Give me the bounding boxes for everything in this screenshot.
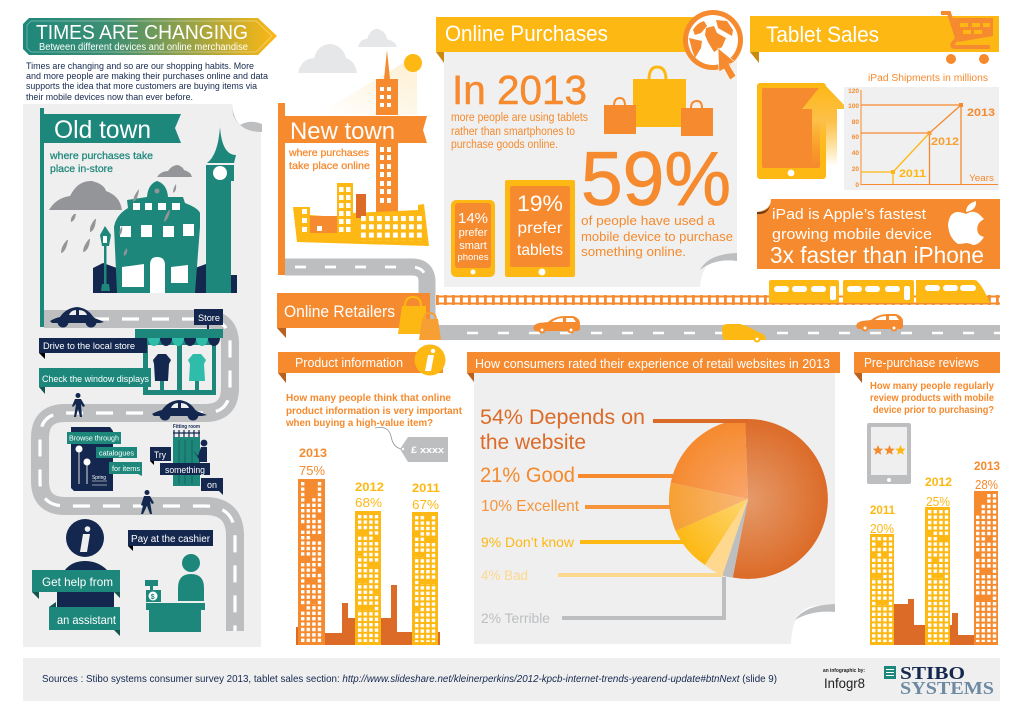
- logo: infogr8: an infographic by:: [823, 668, 865, 674]
- bar 2013: 2013: [299, 446, 327, 460]
- line chart: ipad shipments: 0: [855, 182, 859, 189]
- 59 percent stat: something online.: [581, 244, 686, 259]
- in 2013 text: purchase goods online.: [451, 139, 558, 151]
- callout: ipad fastest growing: [757, 199, 1000, 269]
- icon: walking person: [141, 490, 154, 514]
- 59 percent stat: 59%: [581, 137, 731, 222]
- bar 2011: [412, 481, 440, 645]
- chart title: iPad Shipments in millions: [868, 73, 988, 84]
- label: check the window displays: [39, 368, 151, 394]
- bar 2012: 25%: [926, 495, 950, 509]
- bar 2013: 28%: [975, 478, 998, 492]
- bar 2012: [925, 477, 952, 645]
- icon: street lamp: [100, 226, 111, 291]
- label: an assistant: an assistant: [57, 613, 117, 627]
- banner: product information: [278, 344, 446, 383]
- heading: old town: Old town: [54, 116, 151, 144]
- label: 4 percent: [481, 568, 723, 583]
- icon: navy car: [152, 400, 207, 420]
- icon: tablet 19 percent: [505, 180, 575, 277]
- label: 9 percent: [481, 535, 684, 550]
- banner: online retailers: Online Retailers: [284, 303, 395, 321]
- bar 2013: 2013: [974, 461, 1000, 473]
- new town subtitle: where purchases: [288, 147, 369, 159]
- callout: ipad fastest growing: iPad is Apple’s fastest: [772, 206, 927, 223]
- bar 2013: [298, 446, 327, 645]
- bar 2012: 2012: [355, 480, 384, 494]
- icon: tablet with stars: [867, 423, 911, 484]
- label: for items: for items: [112, 464, 140, 473]
- icon: yellow car: [722, 324, 766, 342]
- label: 2 percent: [481, 577, 726, 626]
- title banner: [23, 18, 277, 55]
- question: pre-purchase reviews: review products with mobile: [870, 392, 994, 404]
- label: on: on: [207, 480, 217, 490]
- line chart: ipad shipments: 2013: [967, 107, 995, 119]
- 59 percent stat: [581, 137, 733, 259]
- intro text: supports the idea that more customers are buying items via: [26, 81, 258, 92]
- bar 2012: 68%: [355, 495, 382, 510]
- label: store: Store: [198, 313, 220, 324]
- icon: person: [193, 440, 207, 462]
- question: product information: when buying a high-value item?: [285, 417, 433, 429]
- icon: tablet 19 percent: tablets: [517, 242, 563, 259]
- icon: info circle: [66, 519, 104, 557]
- heading: new town: [278, 103, 427, 275]
- icon: info: [414, 344, 446, 376]
- chart: pre-purchase buildings: [870, 461, 1000, 645]
- icon: tablet 19 percent: 19%: [517, 191, 563, 216]
- label: something: [160, 463, 210, 475]
- label: 2 percent: 2% Terrible: [481, 611, 550, 626]
- icon: walking person: [72, 393, 85, 417]
- callout: ipad fastest growing: growing mobile device: [772, 226, 932, 243]
- label: browse through: Browse through: [69, 434, 119, 442]
- line chart: ipad shipments: [844, 87, 999, 190]
- banner: pre-purchase reviews: [854, 352, 1000, 383]
- new town: orange tower: [376, 50, 398, 213]
- banner: pre-purchase reviews: Pre-purchase reviews: [864, 356, 979, 370]
- in 2013 text: more people are using tablets: [451, 112, 588, 124]
- label: 21 percent: 21% Good: [480, 464, 575, 487]
- icon: price tag: £ xxxx: [411, 445, 445, 456]
- bar 2012: 2012: [925, 477, 952, 489]
- label: store: [194, 309, 223, 329]
- label: 4 percent: 4% Bad: [481, 568, 528, 583]
- label: 9 percent: 9% Don’t know: [481, 535, 574, 550]
- line chart: ipad shipments: 100: [848, 103, 859, 110]
- old town subtitle: where purchases take: [49, 150, 153, 162]
- intro text: Times are changing and so are our shopping habits. More: [26, 61, 254, 72]
- sources text: Sources : Stibo systems consumer survey 2013, tablet sales section: http://www.slideshare.net/kleinerperkins/2012-kpcb-internet-trends-yearend-update#btnNext (slide 9): [42, 673, 777, 685]
- page curl: [791, 604, 835, 644]
- callout: ipad fastest growing: 3x faster than iPhone: [770, 242, 984, 268]
- line chart: ipad shipments: 80: [852, 119, 859, 126]
- icon: shopping cart: [941, 13, 993, 64]
- logo: infogr8: [823, 668, 865, 691]
- store front: [135, 329, 223, 395]
- heading: old town: [44, 114, 181, 144]
- label: try: [150, 447, 171, 465]
- new town subtitle: take place online: [289, 160, 370, 172]
- panel: old town: [23, 104, 262, 647]
- bar 2011: 2011: [412, 481, 440, 495]
- icon: till: $: [151, 594, 155, 601]
- new town: clouds and sun: [298, 29, 422, 115]
- old town skyline: [93, 127, 237, 293]
- icon: smartphone 14 percent: 14%: [458, 210, 488, 227]
- icon: tablet 19 percent: prefer: [518, 220, 563, 237]
- page curl: [232, 104, 262, 132]
- line chart: ipad shipments: 120: [848, 88, 859, 95]
- line chart: ipad shipments: 2012: [931, 136, 959, 148]
- bar 2013: [974, 461, 1000, 645]
- bar 2011: 67%: [412, 497, 439, 512]
- intro text: their mobile devices now than ever before.: [26, 92, 193, 103]
- icon: ipad with growth arrow: [757, 83, 848, 179]
- icon: shopping bags: [604, 67, 713, 136]
- old town subtitle: [49, 150, 153, 175]
- line chart: ipad shipments: 20: [852, 166, 859, 173]
- question: pre-purchase reviews: device prior to purchasing?: [873, 404, 994, 416]
- flag pole: [40, 108, 44, 327]
- title banner: TIMES ARE CHANGING: [36, 22, 248, 44]
- question: product information: How many people think that online: [286, 392, 451, 404]
- logo: stibo systems: [884, 663, 994, 698]
- icon: navy car: [50, 307, 104, 328]
- road: [40, 319, 235, 631]
- label: try: Try: [154, 450, 166, 460]
- icon: train: [769, 280, 990, 303]
- banner: ratings: [467, 352, 840, 382]
- label: get help from: Get help from: [42, 575, 113, 589]
- pie chart: [669, 419, 828, 579]
- icon: orange car: [533, 316, 580, 334]
- label: 10 percent: 10% Excellent: [481, 498, 580, 515]
- panel: retail website ratings: [467, 352, 840, 644]
- icon: smartphone 14 percent: prefer: [459, 227, 488, 239]
- question: product information: [285, 392, 462, 429]
- logo: stibo systems: SYSTEMS: [900, 678, 994, 698]
- in 2013 text: In 2013: [452, 67, 587, 113]
- label: something: something: [165, 465, 205, 475]
- banner: product information: Product information: [295, 356, 403, 370]
- 59 percent stat: of people have used a: [581, 213, 716, 228]
- logo: infogr8: Infogr8: [824, 675, 865, 691]
- label: pay at the cashier: Pay at the cashier: [131, 534, 211, 545]
- icon: retail bags: [398, 297, 441, 340]
- icon: smartphone 14 percent: phones: [457, 252, 489, 263]
- bar 2011: 2011: [870, 505, 896, 517]
- icon: apple: [948, 201, 984, 245]
- fitting room: [173, 424, 207, 486]
- intro text: and more people are making their purchases online and data: [26, 71, 269, 82]
- intro text: [26, 61, 269, 103]
- icon: smartphone 14 percent: smart: [459, 240, 487, 252]
- banner: online retailers: [277, 293, 441, 340]
- in 2013 text: [451, 67, 588, 151]
- panel: online purchases: [436, 10, 743, 287]
- catalogue: Spring: [92, 475, 106, 481]
- label: on: [201, 478, 223, 495]
- label: 21 percent: [480, 464, 673, 487]
- heading: new town: New town: [290, 118, 395, 145]
- question: product information: product information is very important: [286, 405, 462, 417]
- banner: tablet sales: Tablet Sales: [766, 22, 879, 47]
- bar 2011: 20%: [870, 522, 894, 536]
- label: 54 percent: the website: [480, 430, 586, 454]
- banner: tablet sales: [750, 13, 999, 64]
- icon: clouds and rain: [49, 165, 192, 253]
- 59 percent stat: mobile device to purchase: [581, 229, 733, 244]
- label: pay at the cashier: [128, 530, 213, 551]
- footer: [23, 658, 1000, 701]
- logo: stibo systems: STIBO: [900, 663, 965, 683]
- bar 2011: [870, 505, 896, 645]
- line chart: ipad shipments: 40: [852, 150, 859, 157]
- in 2013 text: rather than smartphones to: [451, 126, 575, 138]
- label: drive to the local store: Drive to the local store: [43, 341, 135, 352]
- bar 2013: 75%: [299, 463, 325, 478]
- road: new town: [285, 267, 427, 332]
- icon: orange car: [856, 314, 903, 332]
- label: catalogues: catalogues: [99, 448, 134, 458]
- new town subtitle: [288, 147, 370, 172]
- title banner: Between different devices and online merchandise: [39, 42, 248, 53]
- banner: online purchases: Online Purchases: [445, 21, 608, 46]
- road: lower with cars: [425, 314, 1000, 342]
- label: 54 percent: [480, 405, 748, 454]
- line chart: ipad shipments: 60: [852, 134, 859, 141]
- icon: turquoise dress: [188, 354, 206, 390]
- label: 10 percent: [481, 498, 671, 515]
- fitting room: Fitting room: [173, 424, 201, 430]
- railway track: [436, 296, 1000, 304]
- label: drive to the local store: [39, 338, 147, 359]
- bar 2012: [355, 480, 384, 645]
- line chart: ipad shipments: Years: [969, 173, 995, 183]
- icon: navy dress: [153, 354, 171, 390]
- banner: online purchases: [436, 17, 726, 63]
- catalogue: [67, 427, 142, 491]
- icon: price tag: [375, 427, 448, 462]
- chart: product information buildings: [296, 446, 440, 645]
- assistant with labels: [32, 561, 120, 636]
- old town subtitle: place in-store: [50, 163, 113, 175]
- question: pre-purchase reviews: How many people regularly: [870, 380, 994, 392]
- icon: globe with cursor: [683, 10, 743, 80]
- line chart: ipad shipments: 2011: [899, 168, 926, 180]
- icon: smartphone 14 percent: [451, 200, 495, 277]
- label: 54 percent: 54% Depends on: [480, 405, 645, 429]
- label: check the window displays: Check the window displays: [42, 374, 149, 385]
- banner: ratings: How consumers rated their experience of retail websites in 2013: [475, 357, 830, 371]
- question: pre-purchase reviews: [870, 380, 994, 416]
- new town: yellow city: [293, 183, 429, 246]
- cashier and till: [145, 554, 205, 632]
